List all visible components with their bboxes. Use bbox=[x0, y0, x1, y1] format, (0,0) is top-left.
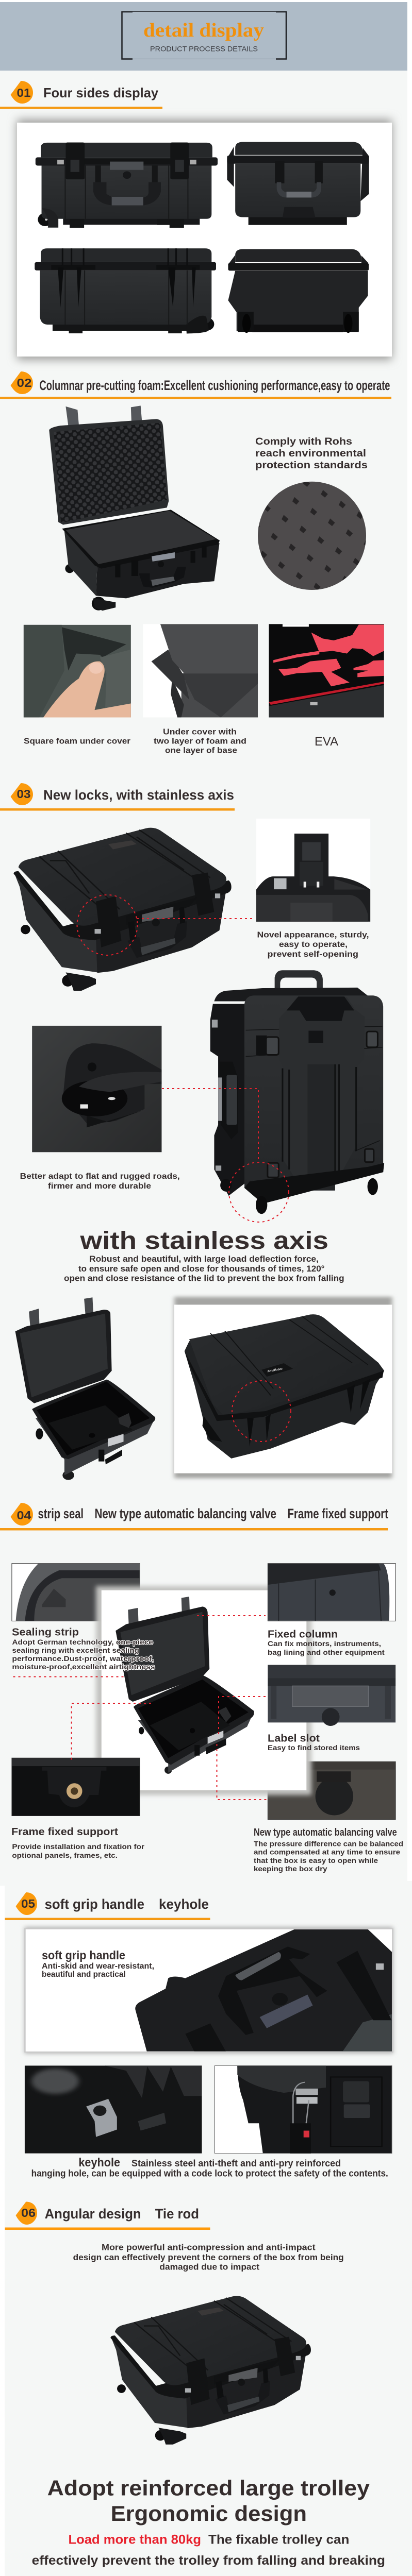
caption: two layers: two layer of foam and bbox=[154, 737, 246, 746]
text: fixed column bbox=[268, 1629, 385, 1656]
text: sealing strip: Adopt German technology, one-piece bbox=[12, 1638, 153, 1646]
text: balancing valve: keeping the box dry bbox=[254, 1865, 327, 1873]
text: fixed column: Fixed column bbox=[268, 1629, 338, 1640]
header banner bbox=[0, 2, 407, 71]
section 05 heading: 05 bbox=[21, 1897, 35, 1910]
photo: square foam bbox=[24, 625, 131, 717]
text: label slot: Label slot bbox=[268, 1733, 320, 1744]
section 05 heading: soft grip handle bbox=[45, 1896, 144, 1912]
text: angular design description: design can effectively prevent the corners of the box from being bbox=[73, 2252, 344, 2262]
caption: better adapt: firmer and more durable bbox=[48, 1182, 151, 1191]
text: load capacity: Load more than 80kg bbox=[68, 2533, 201, 2547]
section 04 heading: strip seal bbox=[38, 1506, 84, 1521]
photo: keyhole with lock bbox=[215, 2065, 392, 2154]
text: comply with Rohs: protection standards bbox=[255, 460, 368, 471]
text: soft grip handle: Anti-skid and wear-resistant, bbox=[42, 1962, 154, 1971]
text: frame fixed support: Provide installation and fixation for bbox=[12, 1842, 145, 1851]
headline: reinforced trolley bbox=[47, 2476, 370, 2526]
section 04 heading: New type automatic balancing valve bbox=[95, 1506, 276, 1521]
section 02 heading: 02 bbox=[17, 376, 32, 389]
text: comply with Rohs bbox=[255, 436, 368, 471]
red leaders around open case bbox=[13, 1616, 268, 1800]
panel: rear-lock photo: Andbao bbox=[267, 1366, 283, 1373]
case open empty bbox=[15, 1297, 155, 1480]
section 01 heading: 01 bbox=[17, 86, 31, 99]
section 03 heading bbox=[0, 783, 235, 811]
caption: novel appearance: easy to operate, bbox=[279, 940, 348, 949]
section 03 heading: New locks, with stainless axis bbox=[43, 787, 234, 803]
section 01 heading bbox=[0, 81, 162, 109]
text: load capacity bbox=[32, 2533, 385, 2568]
text: sealing strip: sealing ring with excellent sealing bbox=[12, 1646, 139, 1654]
title: detail display bbox=[143, 20, 264, 41]
text: keyhole caption: keyhole bbox=[78, 2156, 120, 2169]
red circle on rear-lock photo bbox=[232, 1381, 291, 1442]
foam close-up circle bbox=[256, 480, 368, 592]
photo: latch bbox=[256, 819, 370, 922]
section 03 heading: 03 bbox=[17, 787, 31, 801]
text: soft grip handle: beautiful and practical bbox=[42, 1970, 126, 1979]
caption: novel appearance: prevent self-opening bbox=[267, 950, 358, 959]
text: comply with Rohs: reach environmental bbox=[255, 448, 366, 459]
text: keyhole caption bbox=[31, 2156, 388, 2178]
text: fixed column: bag lining and other equipment bbox=[268, 1648, 385, 1656]
caption: EVA: EVA bbox=[315, 735, 338, 749]
panel: four sides display bbox=[17, 120, 392, 360]
case side view handle bbox=[227, 142, 369, 225]
headline: reinforced trolley: Ergonomic design bbox=[111, 2501, 307, 2526]
section 06 heading: Tie rod bbox=[155, 2206, 199, 2222]
stainless axis description: Robust and beautiful, with large load deflection force, bbox=[89, 1254, 319, 1264]
photo: label slot bbox=[268, 1665, 395, 1726]
text: label slot bbox=[268, 1733, 360, 1752]
photo: sealing strip bbox=[12, 1564, 140, 1621]
text: sealing strip: Sealing strip bbox=[12, 1627, 79, 1638]
stainless axis description: to ensure safe open and close for thousands of times, 120° bbox=[78, 1264, 325, 1274]
section 04 heading bbox=[0, 1503, 388, 1530]
case open with foam bbox=[49, 405, 220, 611]
photo: wheel close-up bbox=[32, 1026, 161, 1152]
caption: two layers: one layer of base bbox=[165, 746, 237, 755]
case front view bbox=[36, 142, 218, 228]
photo: fixed column bbox=[268, 1564, 395, 1621]
text: frame fixed support: Frame fixed support bbox=[11, 1826, 118, 1838]
text: sealing strip: moisture-proof,excellent airtightness bbox=[12, 1663, 155, 1671]
text: balancing valve: that the box is easy to open while bbox=[254, 1856, 378, 1865]
text: fixed column: Can fix monitors, instruments, bbox=[268, 1639, 381, 1648]
case with trolley plate, back view bbox=[210, 970, 384, 1222]
section 06 heading: Angular design bbox=[45, 2206, 141, 2222]
text: keyhole caption: hanging hole, can be equipped with a code lock to protect the safety of the contents. bbox=[31, 2168, 388, 2178]
text: frame fixed support bbox=[11, 1826, 145, 1859]
subtitle: PRODUCT PROCESS DETAILS bbox=[150, 45, 258, 53]
caption: better adapt: Better adapt to flat and rugged roads, bbox=[20, 1172, 180, 1181]
text: frame fixed support: optional panels, frames, etc. bbox=[12, 1851, 118, 1859]
red dashed leaders bbox=[137, 919, 258, 1162]
panel: rear-lock photo bbox=[174, 1297, 392, 1478]
photo: balancing valve bbox=[268, 1761, 395, 1820]
text: sealing strip: performance.Dust-proof, waterproof, bbox=[12, 1654, 154, 1663]
caption: two layers bbox=[154, 727, 246, 755]
headline: with stainless axis: with stainless axis bbox=[79, 1227, 328, 1255]
text: soft grip handle bbox=[42, 1948, 154, 1979]
photo: keyhole close-up bbox=[25, 2065, 202, 2154]
text: angular design description: More powerful anti-compression and anti-impact bbox=[102, 2243, 316, 2252]
caption: two layers: Under cover with bbox=[163, 727, 237, 737]
text: balancing valve: The pressure difference can be balanced bbox=[254, 1840, 403, 1848]
text: comply with Rohs: Comply with Rohs bbox=[255, 436, 352, 447]
case bottom wheels view bbox=[228, 249, 369, 333]
text: load capacity: effectively prevent the trolley from falling and breaking bbox=[32, 2553, 385, 2568]
panel: soft grip handle bbox=[24, 1927, 393, 2054]
section 01 heading: Four sides display bbox=[43, 85, 159, 100]
text: label slot: Easy to find stored items bbox=[268, 1743, 360, 1752]
text: angular design description bbox=[73, 2243, 344, 2272]
headline: reinforced trolley: Adopt reinforced large trolley bbox=[47, 2476, 370, 2500]
text: angular design description: damaged due to impact bbox=[159, 2262, 259, 2272]
section 06 heading bbox=[5, 2202, 210, 2230]
stainless axis description: open and close resistance of the lid to prevent the box from falling bbox=[64, 1274, 344, 1283]
section 05 heading bbox=[5, 1892, 210, 1920]
text: load capacity: The fixable trolley can bbox=[208, 2533, 349, 2547]
caption: novel appearance: Novel appearance, sturdy, bbox=[257, 930, 369, 940]
text: balancing valve bbox=[254, 1827, 403, 1873]
photo: layered foam bbox=[143, 624, 258, 717]
caption: better adapt bbox=[20, 1172, 180, 1191]
text: balancing valve: and compensated at any time to ensure bbox=[254, 1848, 400, 1856]
text: keyhole caption: Stainless steel anti-theft and anti-pry reinforced bbox=[131, 2158, 341, 2168]
section 06 heading: 06 bbox=[21, 2206, 36, 2219]
case closed angular bbox=[110, 2296, 311, 2445]
photo: EVA red cutouts bbox=[269, 624, 384, 717]
stainless axis description bbox=[64, 1254, 344, 1283]
caption: square foam: Square foam under cover bbox=[24, 737, 130, 746]
case rear view bbox=[35, 248, 216, 333]
case closed with red circle bbox=[14, 828, 232, 991]
section 05 heading: keyhole bbox=[159, 1896, 209, 1912]
panel: open case centre bbox=[96, 1586, 311, 1795]
caption: novel appearance bbox=[257, 930, 369, 959]
section 02 heading bbox=[0, 371, 391, 399]
photo: frame fixed support bbox=[12, 1758, 140, 1816]
text: sealing strip bbox=[12, 1627, 155, 1671]
section 04 heading: 04 bbox=[17, 1509, 31, 1522]
text: soft grip handle: soft grip handle bbox=[42, 1948, 125, 1962]
